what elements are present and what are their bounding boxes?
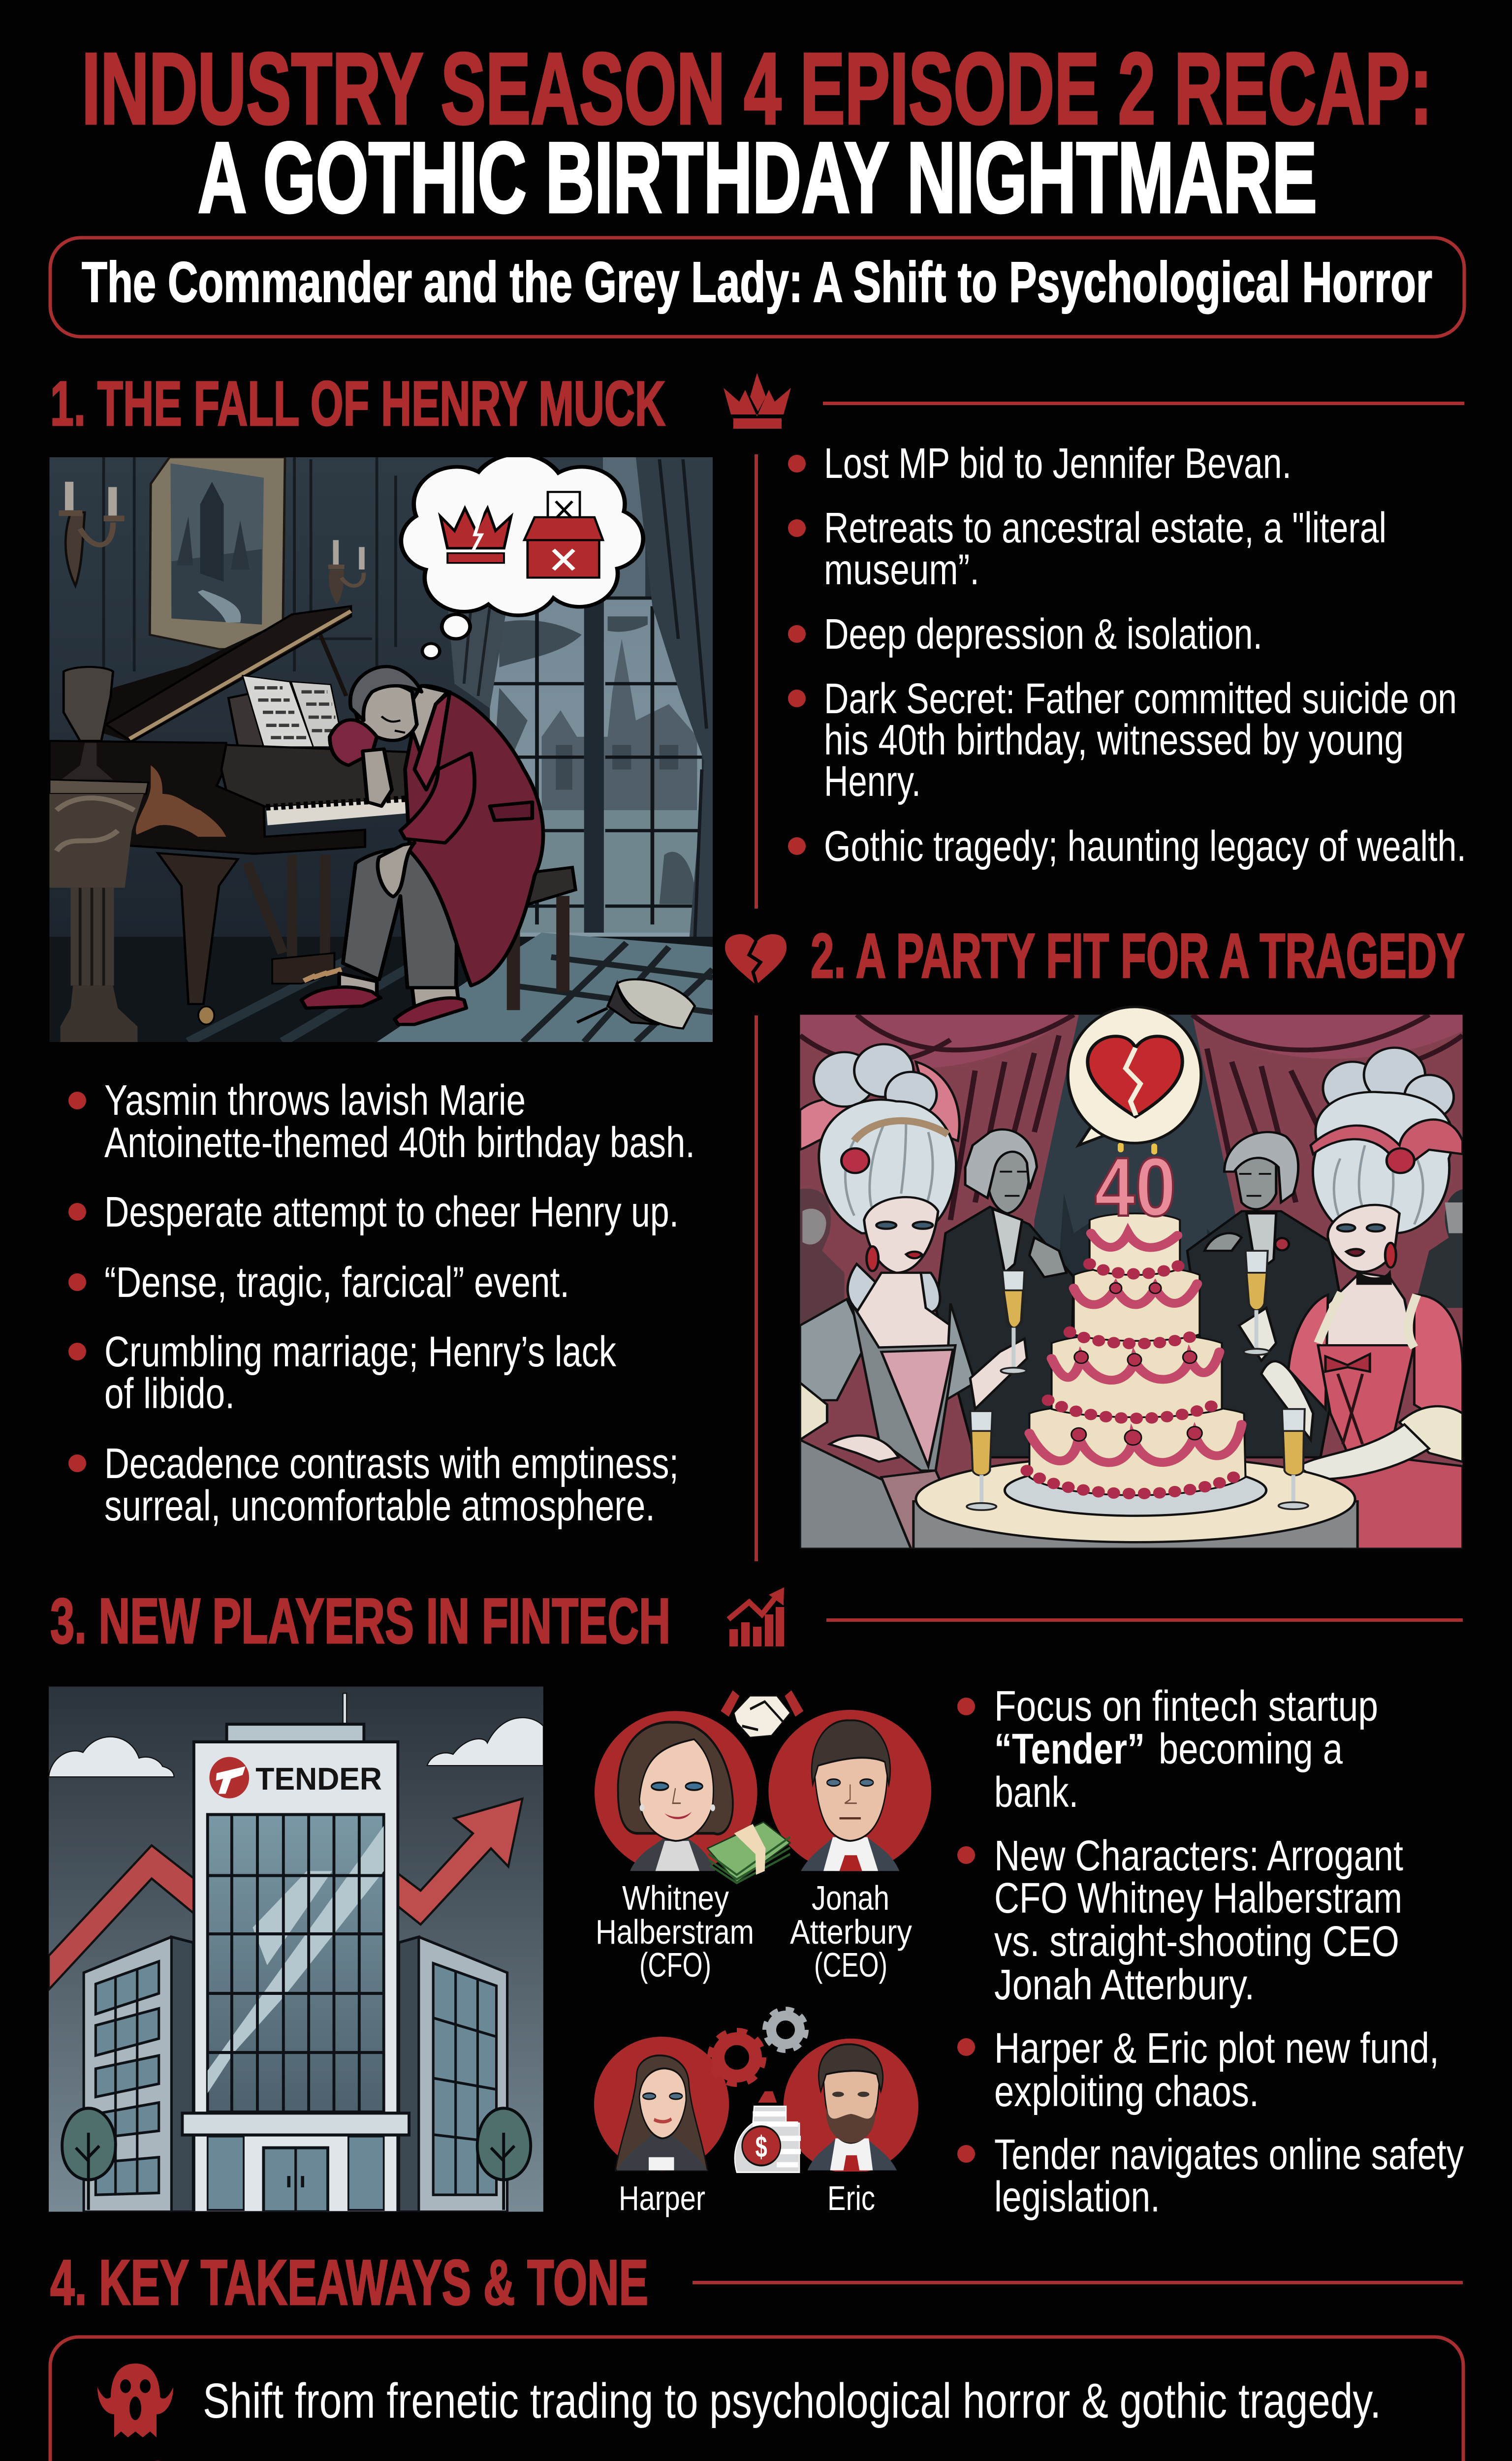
icon: grey gear: [766, 2010, 805, 2050]
illustration: Tender headquarters: [49, 1686, 543, 2212]
left woman: [800, 1044, 1027, 1549]
pedestal and bust: [49, 667, 148, 1042]
icon: money bag: $: [756, 2131, 767, 2164]
heading: section 3: 3. NEW PLAYERS IN FINTECH: [50, 1585, 670, 1657]
heading: section 4: 4. KEY TAKEAWAYS & TONE: [50, 2246, 648, 2318]
icon: handshake: [721, 1690, 803, 1737]
sconce middle: [328, 540, 365, 604]
character portraits: [594, 1690, 931, 2174]
left gentleman: [936, 1130, 1074, 1457]
trees: [62, 2108, 531, 2210]
character names: Whitney: [622, 1879, 729, 1917]
bullet list: the party: Crumbling marriage; Henry’s lack: [104, 1328, 616, 1376]
main tower: [182, 1693, 409, 2212]
bullet list: the party: of libido.: [104, 1370, 235, 1418]
curtains: [800, 1015, 1463, 1069]
bullet list: Henry's fall: Henry.: [824, 757, 921, 805]
cake: [1029, 1213, 1246, 1495]
character names: [596, 1879, 912, 2217]
portrait: Eric: [784, 2039, 918, 2174]
illustration: Marie Antoinette party: [800, 1007, 1463, 1549]
left building: [84, 1937, 193, 2212]
character names: Halberstram: [596, 1913, 754, 1951]
portrait: Harper: [594, 2037, 729, 2172]
bullet list: the party: Yasmin throws lavish Marie: [104, 1076, 526, 1124]
portrait: Whitney: [595, 1711, 757, 1874]
piano: [49, 606, 436, 1024]
portrait: Jonah: [768, 1710, 931, 1872]
bullet list: the party: [68, 1076, 695, 1530]
tablecloth and table: [914, 1456, 1357, 1549]
bullet list: fintech: “Tender”: [994, 1725, 1145, 1773]
bullet list: fintech: CFO Whitney Halberstram: [994, 1874, 1402, 1922]
icon: money bag: [735, 2091, 801, 2172]
character names: Harper: [619, 2179, 705, 2217]
icon: crown: [724, 373, 791, 429]
character names: Atterbury: [790, 1913, 912, 1951]
icon: ghost: [97, 2364, 173, 2437]
icon: rising chart: [728, 1587, 784, 1646]
bullet list: fintech: exploiting chaos.: [994, 2068, 1259, 2115]
character names: Jonah: [812, 1879, 889, 1917]
bullet list: fintech: Focus on fintech startup: [994, 1682, 1378, 1730]
right building: [399, 1937, 507, 2212]
bullet list: Henry's fall: Deep depression & isolation.: [824, 610, 1262, 658]
icon: broken heart: [725, 934, 787, 986]
main tower: TENDER: [255, 1762, 382, 1797]
bullet list: Henry's fall: [788, 440, 1466, 870]
icon: red gear: [711, 2032, 762, 2083]
man: [301, 666, 543, 1024]
bullet list: fintech: Jonah Atterbury.: [994, 1961, 1255, 2009]
thought bubble: [399, 452, 645, 660]
sconce left: [59, 482, 125, 586]
bullet list: the party: “Dense, tragic, farcical” event.: [104, 1259, 569, 1306]
bullet list: the party: Desperate attempt to cheer Henry up.: [104, 1188, 679, 1236]
bullet list: the party: surreal, uncomfortable atmosphere.: [104, 1482, 655, 1530]
background guests: [800, 1189, 1463, 1325]
painting: [150, 457, 285, 649]
bullet list: fintech: becoming a: [1159, 1725, 1343, 1773]
candles 40: 40: [1095, 1140, 1176, 1233]
panel: key takeaways: [50, 2337, 1463, 2461]
bullet list: fintech: bank.: [994, 1768, 1078, 1816]
bullet list: fintech: New Characters: Arrogant: [994, 1832, 1403, 1880]
right gentleman: [1187, 1132, 1345, 1457]
bullet list: fintech: legislation.: [994, 2173, 1160, 2221]
character names: (CEO): [814, 1946, 887, 1984]
bullet list: fintech: [957, 1682, 1464, 2221]
title: [82, 32, 1432, 234]
bullet list: Henry's fall: museum”.: [824, 546, 979, 594]
speech bubble with broken heart: [1068, 1007, 1201, 1145]
bullet list: Henry's fall: Lost MP bid to Jennifer Bevan.: [824, 440, 1292, 487]
dropped mask: [577, 979, 695, 1029]
curtains: [447, 457, 713, 953]
character names: (CFO): [639, 1946, 711, 1984]
bullet list: the party: Decadence contrasts with emptiness;: [104, 1440, 679, 1487]
icon: broken chain: [89, 2459, 178, 2461]
champagne glasses: [967, 1251, 1308, 1510]
bullet list: fintech: vs. straight-shooting CEO: [994, 1918, 1399, 1965]
bullet list: the party: Antoinette-themed 40th birthday bash.: [104, 1119, 695, 1167]
right woman: [1239, 1048, 1463, 1549]
bullet list: Henry's fall: Retreats to ancestral estate, a "literal: [824, 504, 1386, 552]
illustration: Henry at the piano: [49, 452, 713, 1043]
heading: section 1: 1. THE FALL OF HENRY MUCK: [50, 369, 665, 439]
icon: cash stack: [707, 1822, 790, 1883]
subtitle banner: [50, 238, 1464, 337]
window: [490, 457, 702, 937]
floor: [49, 933, 713, 1043]
character names: Eric: [827, 2179, 875, 2217]
bench: [506, 867, 575, 1010]
